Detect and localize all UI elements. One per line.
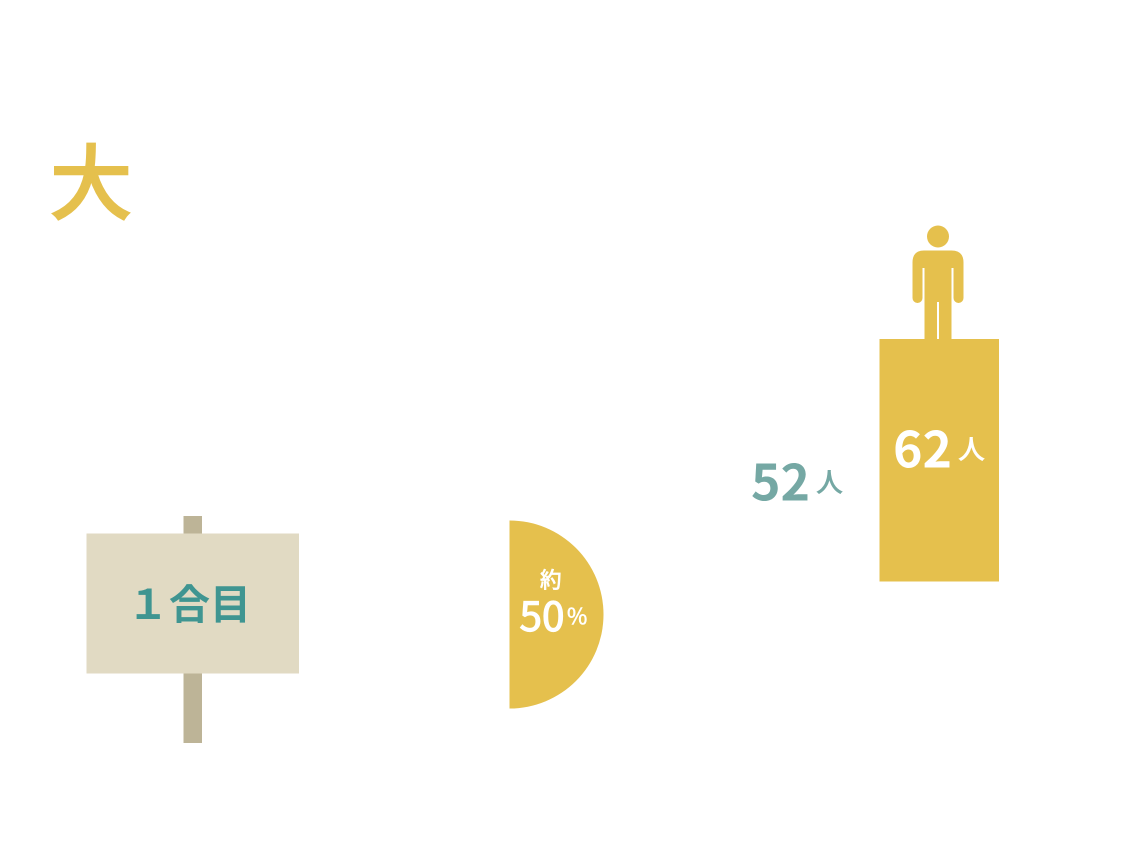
number 52: 52 xyxy=(751,444,810,516)
about label: 約 xyxy=(540,564,562,594)
people unit: 人 xyxy=(958,430,985,466)
signpost pole xyxy=(184,516,202,743)
number 62: 62 xyxy=(893,410,952,482)
half circle xyxy=(510,520,604,708)
icon: person xyxy=(912,226,964,340)
heading character: 大 xyxy=(50,120,132,236)
percentage value: 50 xyxy=(520,584,564,643)
sign board xyxy=(86,534,299,674)
sign label: １ xyxy=(128,571,168,631)
sign label: 合目 xyxy=(169,571,251,631)
pillar xyxy=(880,339,999,582)
percent sign: % xyxy=(567,599,587,631)
person on pillar xyxy=(880,226,999,582)
half circle chart xyxy=(510,520,604,708)
people unit: 人 xyxy=(816,462,843,500)
signpost xyxy=(86,516,299,743)
comparison value: 52 people xyxy=(751,444,843,516)
